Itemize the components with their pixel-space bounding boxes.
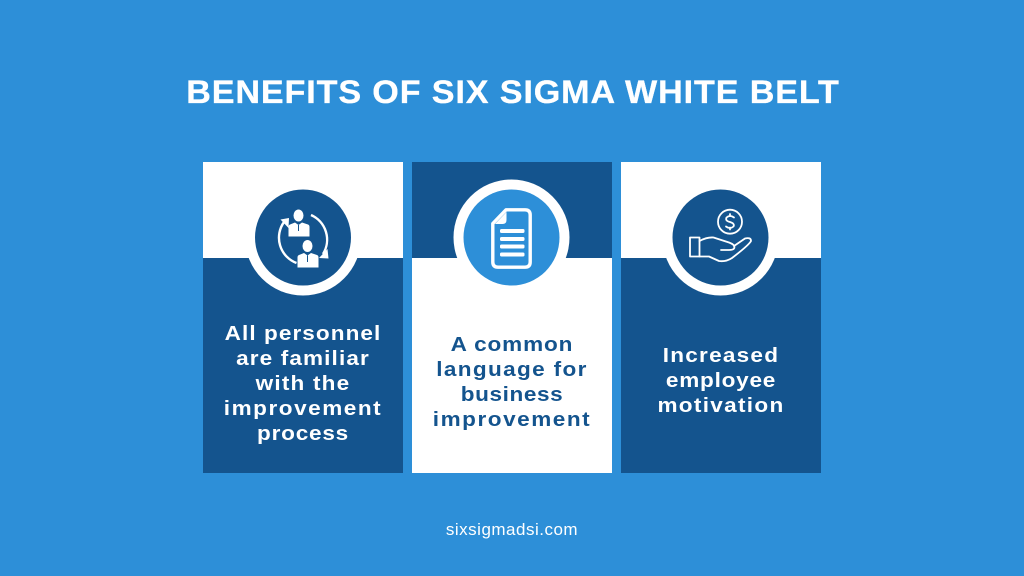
panel top band	[203, 162, 403, 258]
footer url: sixsigmadsi.com	[446, 520, 578, 539]
text: common language	[433, 332, 591, 430]
panel top band	[621, 162, 821, 258]
text: increased motivation: motivation	[657, 394, 785, 417]
text: common language: A common	[451, 332, 573, 356]
text: all personnel: are familiar	[236, 346, 370, 370]
panel top band	[412, 162, 612, 258]
icon: document	[454, 180, 570, 286]
text: increased motivation: employee	[666, 369, 776, 392]
text: increased motivation	[657, 344, 785, 417]
text: all personnel: All personnel	[225, 322, 381, 344]
icon: hand with coin	[666, 190, 775, 296]
text: common language: improvement	[433, 408, 591, 430]
panel: personnel familiar	[203, 162, 403, 473]
title: BENEFITS OF SIX SIGMA WHITE BELT	[186, 74, 840, 110]
text: all personnel	[224, 322, 382, 444]
text: all personnel: improvement	[224, 396, 382, 420]
text: all personnel: process	[257, 422, 349, 444]
panel: employee motivation	[621, 162, 821, 473]
icon: people cycle	[248, 190, 358, 296]
text: common language: language for	[436, 358, 588, 380]
text: increased motivation: Increased	[663, 344, 779, 367]
text: common language: business	[461, 382, 563, 406]
panel: common language	[412, 162, 612, 473]
text: all personnel: with the	[256, 372, 350, 394]
